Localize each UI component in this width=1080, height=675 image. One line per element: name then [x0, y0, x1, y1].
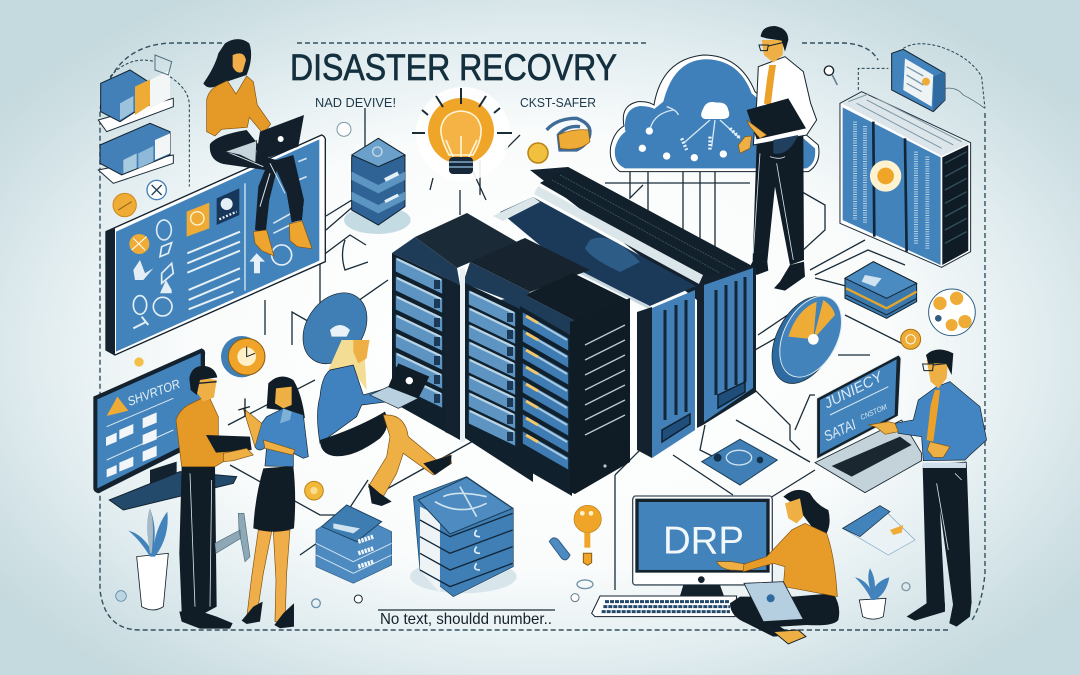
shoes	[750, 260, 768, 275]
dashed frame	[100, 43, 985, 630]
face	[353, 340, 369, 363]
rack middle blue side	[637, 284, 703, 458]
hair	[267, 377, 305, 418]
subtitle left: NAD DEVIVE!	[315, 95, 396, 110]
shirt	[742, 523, 837, 597]
rack black top pieces	[392, 213, 628, 335]
laptop	[388, 363, 429, 398]
icon: small stand and coin	[215, 481, 323, 562]
icon: blue and orange disc	[759, 286, 854, 394]
icon: small plant right	[855, 568, 910, 619]
laptop right: JUNIECY	[821, 369, 887, 413]
blouse	[253, 408, 308, 467]
rack back right	[530, 167, 756, 425]
head	[762, 40, 783, 63]
hands	[868, 422, 898, 434]
folder	[747, 98, 806, 139]
connector lines	[228, 108, 905, 610]
icon: blue disc with cloud	[290, 281, 380, 376]
cloud	[610, 55, 819, 172]
shoes	[242, 602, 263, 624]
server racks	[392, 167, 756, 496]
monitor: warning screen	[93, 348, 237, 510]
icon: tape roll	[547, 118, 590, 150]
top	[207, 76, 271, 136]
head	[927, 358, 948, 388]
laptop right: SATAI	[822, 417, 859, 445]
tie	[764, 65, 776, 106]
shirt	[176, 395, 243, 467]
person: man in blue shirt	[868, 350, 987, 627]
face	[233, 53, 246, 73]
legs	[923, 462, 972, 607]
shoes	[253, 230, 274, 256]
icon: circuit chip	[702, 439, 777, 485]
hair	[203, 39, 251, 87]
panel: blue dashboard board	[106, 135, 325, 355]
tie	[927, 390, 940, 442]
shirt	[895, 382, 987, 461]
skirt	[253, 466, 295, 532]
person: blonde woman with laptop	[317, 340, 452, 506]
person: man in white shirt with folder	[738, 26, 817, 291]
icon: large disk stack	[410, 477, 517, 597]
icon: magnifier and top device	[824, 44, 985, 112]
shirt	[753, 57, 817, 145]
monitor: DRP	[633, 496, 772, 596]
laptop right: CNSTOM	[859, 402, 889, 422]
subtitle right: CKST-SAFER	[520, 95, 596, 110]
legs	[368, 415, 452, 500]
icon: plant left	[116, 508, 362, 610]
laptop	[744, 582, 803, 622]
rack A	[392, 253, 465, 442]
icon: light bulb	[412, 87, 512, 181]
person: man in orange shirt	[176, 366, 253, 629]
laptop	[255, 115, 304, 163]
rack C	[520, 298, 630, 496]
icon: small server stack	[316, 505, 392, 583]
legs	[730, 593, 839, 637]
icon: key and small clip	[549, 505, 601, 602]
legs	[247, 530, 290, 623]
blue top	[317, 365, 388, 443]
legs	[753, 133, 804, 265]
icon: coin near bulb	[528, 143, 548, 163]
person: woman with laptop on board	[203, 39, 312, 256]
person: woman in blue shirt and skirt	[238, 377, 308, 628]
shoes	[907, 603, 945, 621]
icon: stacked disks right	[845, 262, 975, 349]
keyboard	[592, 596, 737, 617]
bottom note: No text, shouldd number..	[380, 611, 552, 628]
legs	[210, 130, 304, 233]
shoes	[179, 610, 233, 629]
legs	[179, 465, 217, 617]
hair	[328, 340, 370, 390]
title: DISASTER RECOVRY	[290, 47, 617, 88]
folder	[206, 435, 252, 453]
icon: server stack top	[337, 122, 411, 234]
icon: orange clock	[134, 336, 265, 377]
rack B	[465, 283, 533, 482]
skirt	[320, 412, 387, 456]
DRP label: DRP	[663, 518, 744, 562]
face	[275, 387, 292, 408]
person: woman seated at monitor	[717, 490, 839, 644]
head	[195, 377, 217, 402]
icon: folded card	[843, 506, 915, 555]
laptop right	[815, 355, 922, 493]
icon: left shelf boxes	[98, 55, 189, 217]
hair	[783, 490, 830, 533]
monitor: warning screen: SHVRTOR	[126, 377, 182, 409]
panel: blue cabinet	[840, 92, 971, 267]
rack top ribbed	[493, 167, 753, 308]
face	[785, 498, 803, 523]
